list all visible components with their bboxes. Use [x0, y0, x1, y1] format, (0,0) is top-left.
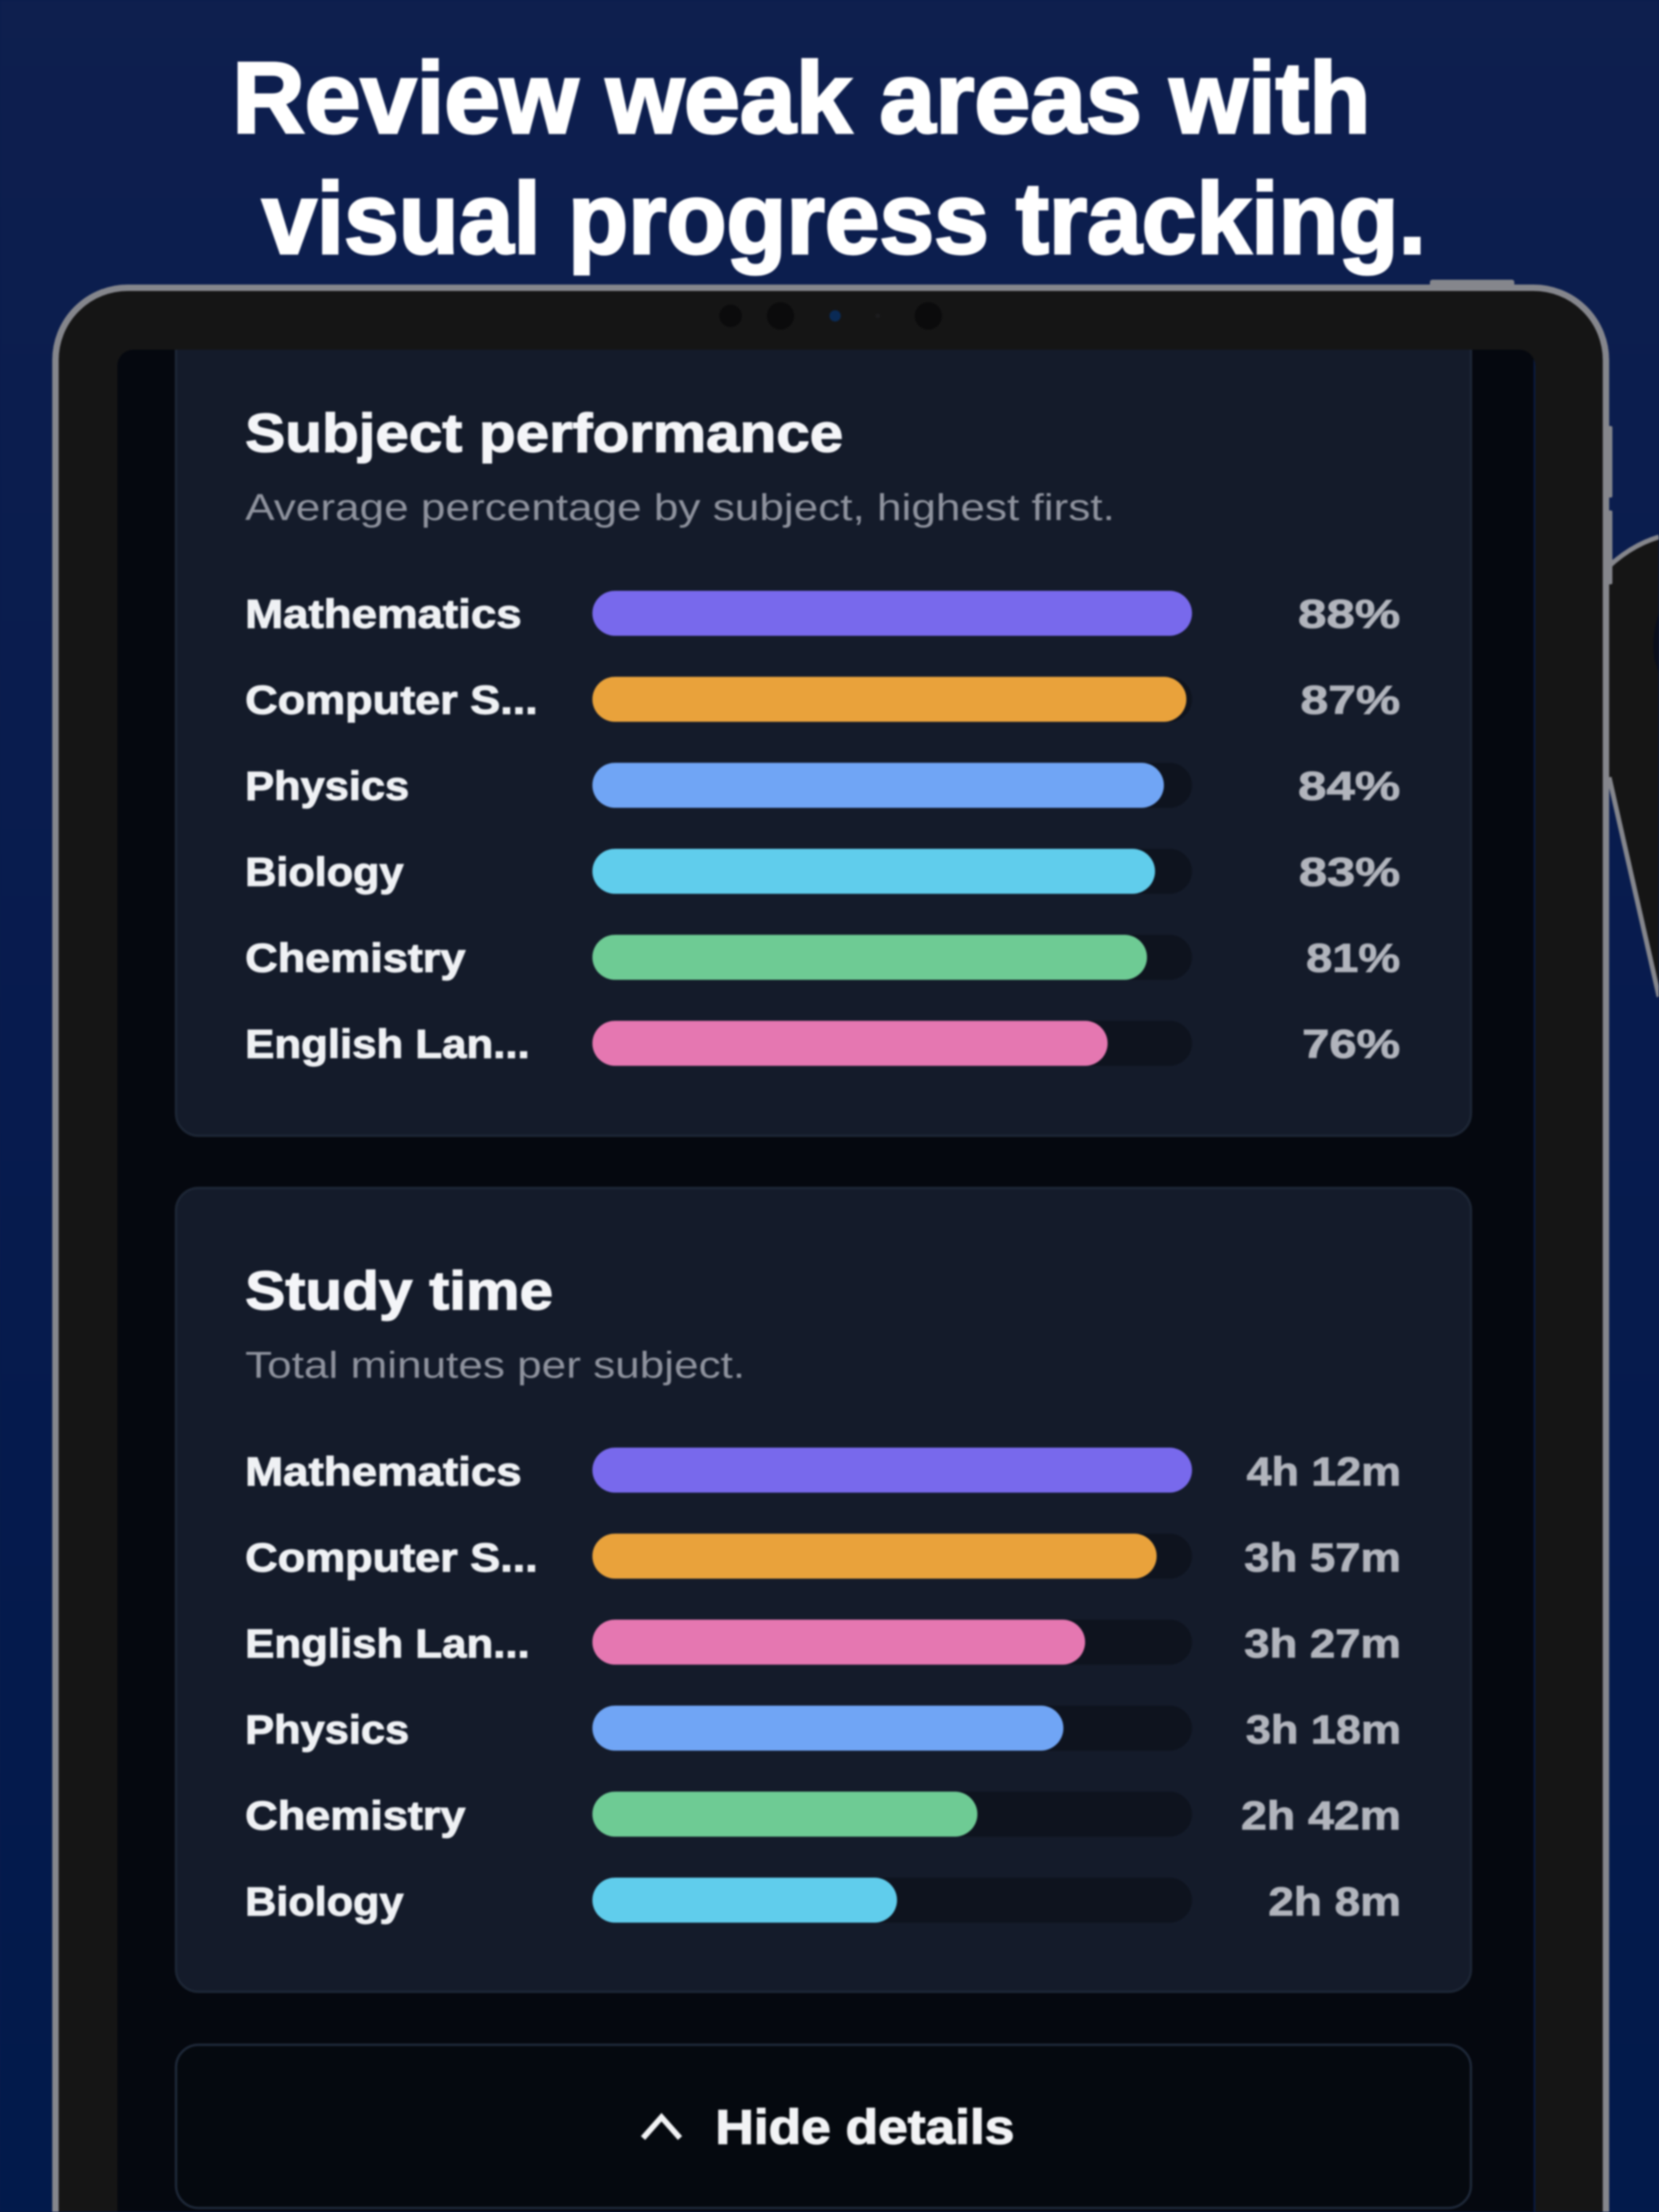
row: Biology 2h 8m: 2h 8m: [1268, 1879, 1401, 1924]
row: English Language 3h 27m: English Lan...: [245, 1621, 530, 1666]
row: Computer Science 3h 57m: Computer S...: [245, 1535, 538, 1580]
camera array: [719, 302, 942, 330]
row: Biology 83%: 83%: [1299, 850, 1400, 895]
row: Computer Science 87%: 87%: [1301, 678, 1400, 723]
row: Computer Science 3h 57m: [245, 1534, 1401, 1580]
title: visual progress tracking.: [262, 163, 1426, 275]
row: Mathematics 4h 12m: [245, 1448, 1401, 1494]
row: Chemistry 2h 42m: 2h 42m: [1241, 1793, 1401, 1838]
row: Physics 3h 18m: 3h 18m: [1246, 1707, 1401, 1752]
row: Physics 3h 18m: Physics: [245, 1707, 409, 1752]
row: Biology 83%: [245, 849, 1400, 895]
row: Computer Science 87%: Computer S...: [245, 678, 538, 723]
row: English Language 3h 27m: 3h 27m: [1244, 1621, 1401, 1666]
row: Biology 2h 8m: Biology: [245, 1879, 403, 1924]
row: English Language 76%: 76%: [1302, 1022, 1400, 1067]
app screen: [117, 305, 1538, 2212]
subtitle: study time: Total minutes per subject.: [245, 1344, 745, 1386]
heading: study time: Study time: [245, 1260, 553, 1321]
row: Chemistry 2h 42m: Chemistry: [245, 1793, 465, 1838]
button: hide details: [176, 2045, 1471, 2208]
row: Mathematics 4h 12m: 4h 12m: [1247, 1449, 1401, 1494]
row: Biology 2h 8m: [245, 1878, 1401, 1924]
row: Physics 3h 18m: [245, 1706, 1401, 1752]
row: Chemistry 81%: [245, 935, 1400, 981]
second tablet partly visible at right: [1608, 537, 1659, 997]
heading: subject performance: Subject performance: [245, 403, 843, 464]
row: Physics 84%: Physics: [245, 764, 409, 809]
title: [232, 43, 1426, 275]
row: Mathematics 88%: [245, 591, 1400, 637]
row: Mathematics 88%: 88%: [1298, 592, 1400, 637]
tablet hardware buttons: [1430, 280, 1612, 584]
button label: Hide details: [715, 2100, 1014, 2154]
row: Mathematics 88%: Mathematics: [245, 592, 522, 637]
title: Review weak areas with: [232, 43, 1370, 154]
row: English Language 3h 27m: [245, 1620, 1401, 1666]
row: Biology 83%: Biology: [245, 850, 403, 895]
panel: study time: [176, 1188, 1471, 1992]
row: English Language 76%: [245, 1021, 1400, 1067]
row: Mathematics 4h 12m: Mathematics: [245, 1449, 522, 1494]
row: English Language 76%: English Lan...: [245, 1022, 530, 1067]
row: Computer Science 87%: [245, 677, 1400, 723]
row: Physics 84%: 84%: [1298, 764, 1400, 809]
row: Chemistry 81%: 81%: [1306, 936, 1400, 981]
panel: subject performance: [176, 305, 1471, 1136]
row: Chemistry 2h 42m: [245, 1792, 1401, 1838]
row: Computer Science 3h 57m: 3h 57m: [1244, 1535, 1401, 1580]
row: Physics 84%: [245, 763, 1400, 809]
row: Chemistry 81%: Chemistry: [245, 936, 465, 981]
subtitle: subject performance: Average percentage by subject, highest first.: [245, 486, 1115, 528]
icon: chevron up: [643, 2117, 680, 2138]
